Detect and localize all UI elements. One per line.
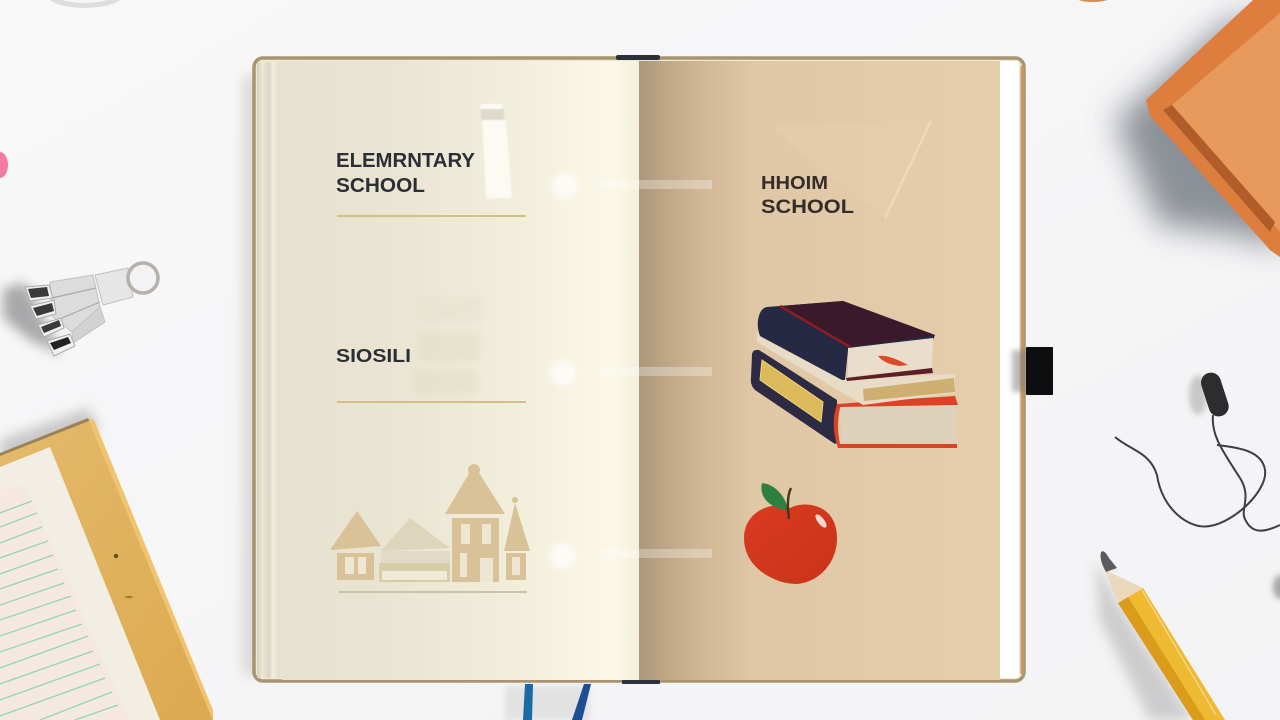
- right page margin strip: [1000, 61, 1019, 678]
- notebook drop shadow: [242, 75, 264, 675]
- right page: high school heading: [761, 173, 854, 218]
- spine clip top: [616, 55, 660, 60]
- left page: [282, 61, 639, 680]
- elastic closure tab: [1012, 347, 1053, 395]
- left page: second label: SIOSILI: [336, 346, 411, 366]
- divider: second label: [337, 401, 526, 403]
- pencil: [1095, 551, 1225, 720]
- binder clip: [3, 263, 158, 356]
- right page: [639, 61, 1000, 680]
- bottom book: [751, 350, 958, 448]
- timeline node 1: [552, 173, 712, 199]
- left page: elementary school heading: [336, 150, 476, 197]
- left page: elementary school heading: SCHOOL: [336, 175, 425, 197]
- open book: [254, 55, 1024, 684]
- orange object at top edge: [1075, 0, 1111, 2]
- small dark shadow at right edge: [1273, 575, 1280, 599]
- faint white column icon: [480, 104, 512, 199]
- faint triangle icon on right page: [770, 120, 932, 218]
- top book: [758, 301, 935, 381]
- left page stack edge: [257, 62, 284, 678]
- right page: high school heading: SCHOOL: [761, 197, 854, 218]
- apple: [744, 483, 837, 584]
- timeline node 3: [550, 543, 712, 569]
- timeline node 2: [550, 360, 712, 386]
- notebook at bottom left: [0, 408, 213, 720]
- apple leaf: [761, 483, 788, 510]
- book cover: [254, 58, 1024, 681]
- stack of books: [751, 301, 958, 448]
- left page: elementary school heading: ELEMRNTARY: [336, 150, 476, 172]
- orange notebook at top right: [1115, 0, 1280, 257]
- apple stem: [788, 488, 791, 519]
- faint building icon: [412, 297, 484, 395]
- right page: high school heading: HHOIM: [761, 173, 828, 193]
- earbud with cable: [1115, 370, 1280, 531]
- divider: elementary school: [337, 215, 526, 217]
- divider: bottom: [339, 591, 527, 593]
- white ball at top left: [44, 0, 126, 8]
- spine clip bottom: [622, 680, 660, 684]
- ribbon bookmarks: [505, 684, 591, 720]
- pink eraser at left edge: [0, 152, 8, 178]
- middle book: [757, 332, 955, 405]
- school buildings illustration: [330, 464, 530, 582]
- apple highlight: [814, 513, 828, 529]
